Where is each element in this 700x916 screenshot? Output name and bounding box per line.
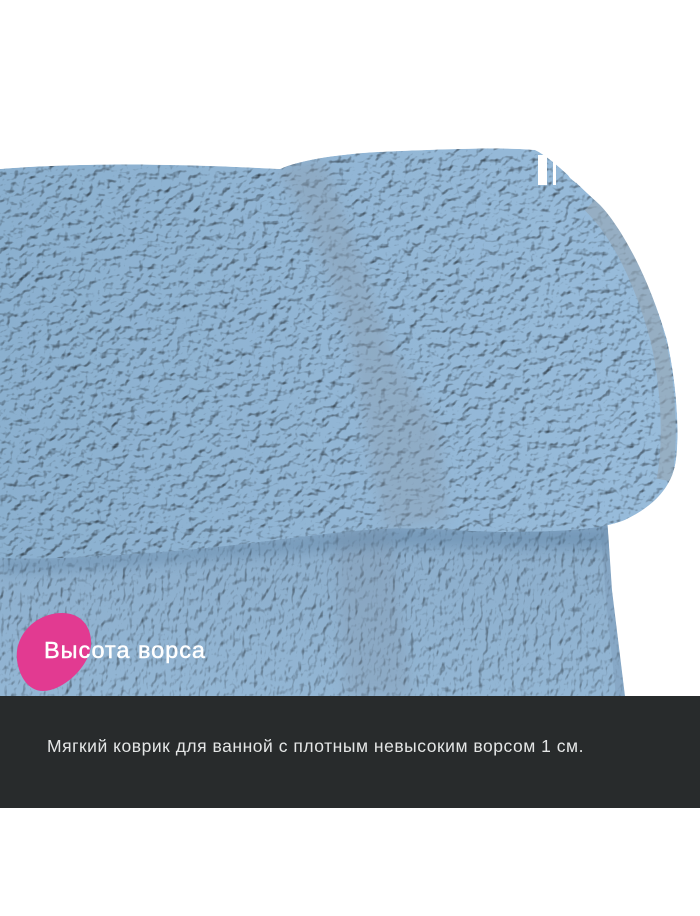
woven stripe across the roll bbox=[278, 161, 448, 530]
upper roll of the mat bbox=[0, 148, 678, 559]
product photo: rolled blue bath mat bbox=[0, 148, 678, 696]
blanked logo fragment on the roll bbox=[538, 155, 576, 185]
stitched edge of the roll bbox=[590, 205, 668, 480]
lower fold of the mat bbox=[0, 525, 625, 696]
pink badge blob bbox=[17, 613, 91, 691]
heading: pile height: Высота ворса bbox=[44, 637, 206, 663]
dark caption band bbox=[0, 696, 700, 808]
caption text: Мягкий коврик для ванной с плотным невысоким ворсом 1 см. bbox=[47, 736, 584, 756]
